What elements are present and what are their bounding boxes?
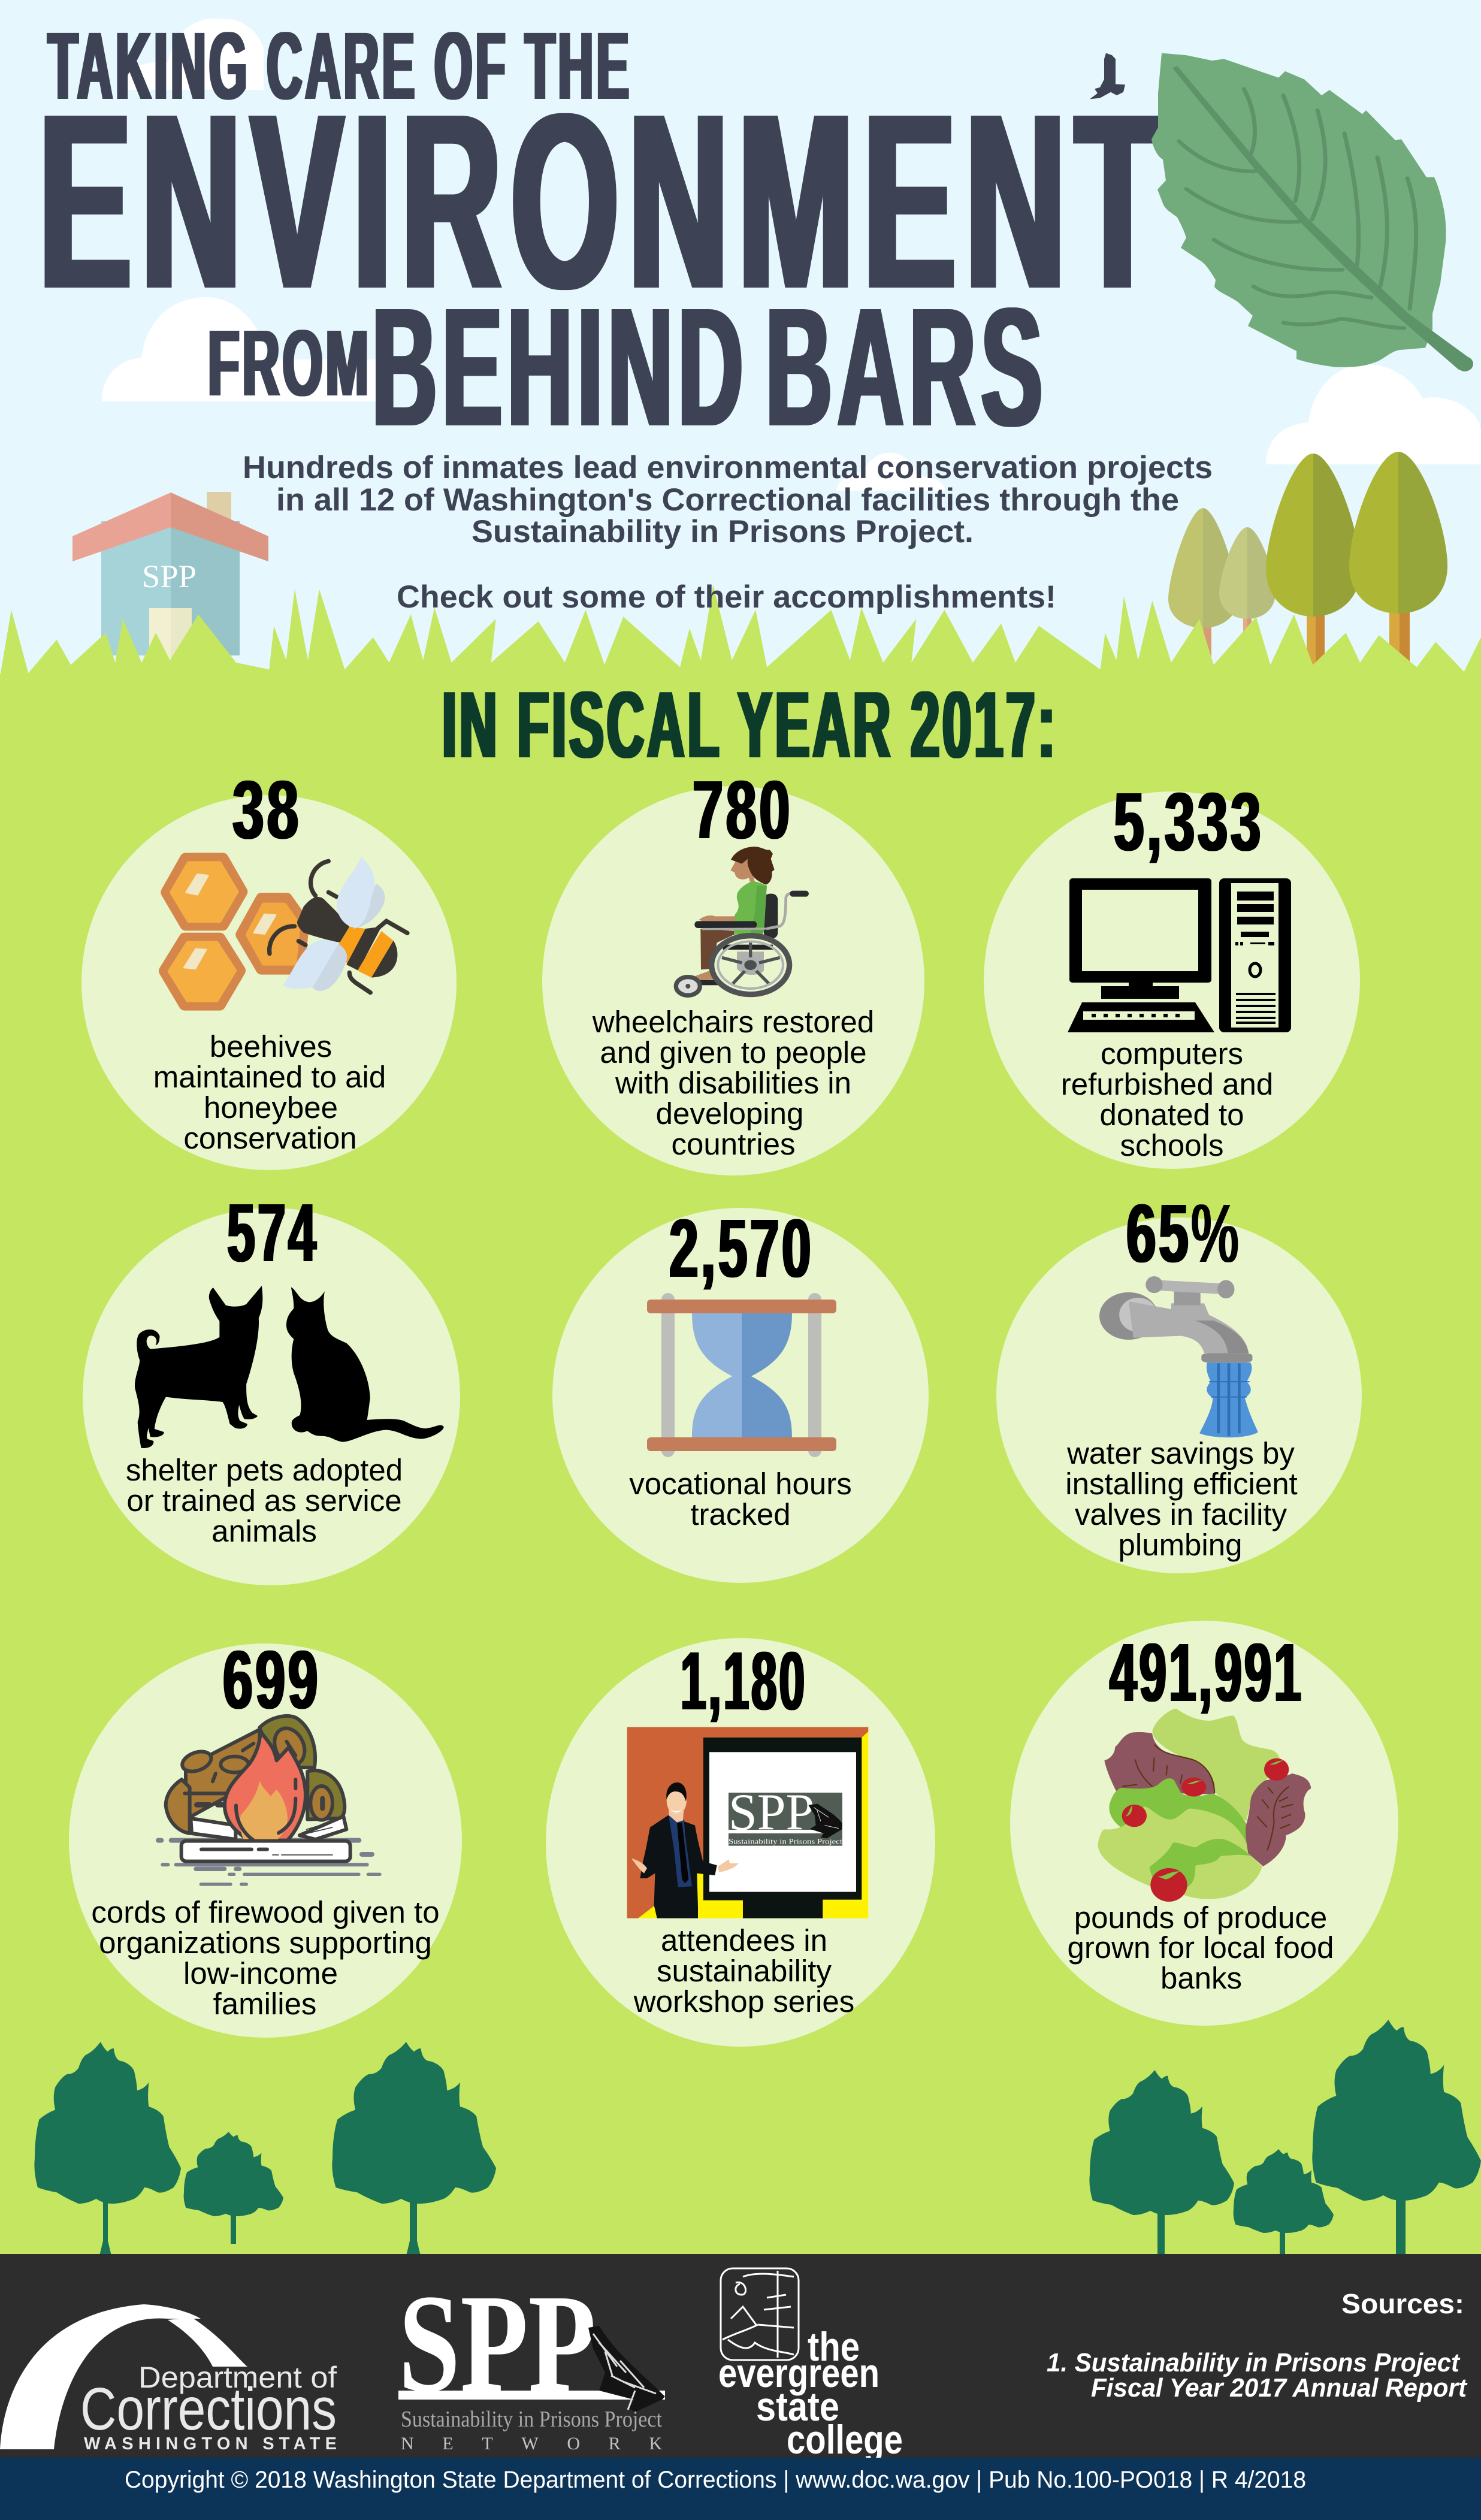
description: computers [1101,1037,1243,1071]
roof [72,492,268,561]
description: low-income [183,1956,338,1990]
college name: evergreen [718,2350,879,2396]
icon: dog and cat silhouettes [135,1286,444,1448]
circle [81,795,457,1170]
icon: desktop computer [1068,878,1291,1032]
description: grown for local food [1067,1930,1334,1965]
copyright text: Copyright © 2018 Washington State Department of Corrections | www.doc.wa.gov | Pub No.100-PO018 | R 4/2018 [125,2467,1306,2493]
description [592,1005,874,1161]
description: refurbished and [1061,1067,1273,1101]
panel: vocational hours [552,1202,929,1583]
description: conservation [183,1121,357,1155]
arch [0,2304,247,2449]
description: schools [1120,1128,1223,1162]
agency text: Corrections [80,2376,337,2443]
panel: workshops [546,1635,935,2047]
number: 65% [1126,1188,1241,1280]
SPP slide logo [729,1783,843,1846]
logo: the evergreen state college [718,2268,903,2462]
description [91,1895,440,2021]
clouds [102,19,1481,491]
icon: leaf [1151,53,1473,371]
description: sustainability [657,1954,832,1988]
sources heading: Sources: [1341,2288,1464,2319]
description: with disabilities in [615,1066,851,1100]
circle [542,786,924,1176]
circle [552,1208,929,1583]
description: shelter pets adopted [126,1453,403,1487]
sources [1047,2288,1468,2403]
description: developing [656,1096,803,1131]
description [629,1467,852,1531]
description [1061,1037,1273,1162]
number: 780 [693,764,793,856]
description: beehives [210,1029,332,1063]
green ground [0,674,1481,2256]
title line: behind: BEHIND [372,273,748,461]
description: workshop series [633,1984,854,2019]
SPP sign: SPP [142,558,197,594]
description: donated to [1099,1098,1244,1132]
intro line 3: Sustainability in Prisons Project. [471,514,974,549]
panel: beehives [81,764,457,1170]
description: or trained as service [126,1483,402,1518]
description [1065,1436,1298,1562]
panel: produce [1010,1621,1398,2026]
description: families [213,1987,316,2021]
intro text [243,450,1213,615]
description: installing efficient [1065,1467,1298,1501]
house walls [101,521,240,655]
panel: firewood [69,1634,462,2038]
agency text: Department of [138,2361,337,2394]
circle [83,1208,460,1585]
college name [718,2324,903,2462]
trees: right cluster [1168,452,1447,668]
description: honeybee [204,1090,338,1125]
SPP slide logo: SPP [729,1783,814,1841]
agency text [80,2361,337,2453]
icon: honeycomb and bee [165,857,407,1005]
number: 1,180 [681,1635,807,1727]
description: wheelchairs restored [592,1005,874,1039]
intro line 1: Hundreds of inmates lead environmental conservation projects [243,450,1213,485]
circle [984,791,1360,1169]
description [1067,1900,1334,1995]
title line: bars: BARS [766,273,1048,461]
icon: water tap [1099,1276,1258,1437]
panel: wheelchairs [542,764,924,1176]
description: cords of firewood given to [91,1895,440,1929]
description [126,1453,403,1548]
house: SPP [72,492,268,659]
college name: state [756,2384,839,2430]
sky background [0,0,1481,779]
description: plumbing [1119,1528,1242,1562]
description: tracked [690,1497,791,1531]
intro line 4: Check out some of their accomplishments! [397,579,1056,615]
description [153,1029,386,1155]
presenter [631,1782,739,1918]
description: banks [1160,1961,1242,1995]
chimney [207,492,231,528]
description: attendees in [661,1923,827,1957]
panel: water savings [996,1188,1362,1573]
SPP slide logo: Sustainability in Prisons Project [729,1837,843,1845]
frog [588,2326,665,2412]
source line 1: 1. Sustainability in Prisons Project [1047,2348,1461,2377]
number: 491,991 [1110,1627,1304,1719]
description: water savings by [1066,1436,1295,1470]
icon: person in wheelchair [676,847,809,995]
circle [1010,1621,1398,2026]
logo: SPP network: SPP [398,2265,596,2421]
description: animals [211,1514,317,1548]
description: and given to people [600,1035,867,1069]
description: countries [672,1127,795,1161]
logo: SPP network: Sustainability in Prisons Project [401,2407,662,2432]
title line: from: FROM [208,311,371,416]
number: 5,333 [1114,776,1264,868]
copyright band [0,2458,1481,2520]
intro line 2: in all 12 of Washington's Correctional facilities through the [276,482,1179,518]
title line: Taking care of the: TAKING CARE OF THE [48,12,632,119]
description: pounds of produce [1074,1900,1327,1935]
circle [69,1643,462,2038]
source line 2: Fiscal Year 2017 Annual Report [1091,2373,1468,2403]
icon: bird [1090,53,1125,99]
icon: presenter and screen [627,1727,868,1918]
description: vocational hours [629,1467,852,1501]
number: 699 [223,1634,321,1726]
icon: hourglass [647,1293,836,1457]
footer band [0,2254,1481,2458]
tree emblem [721,2268,799,2360]
college name: college [787,2417,903,2462]
panel: computers [984,776,1360,1169]
circle [546,1638,935,2047]
door [149,608,192,659]
logo: SPP network: NETWORK [401,2434,662,2453]
icon: campfire and logs [156,1716,382,1886]
title [39,12,1169,461]
logo: Department of Corrections [0,2304,337,2453]
description: organizations supporting [99,1926,432,1960]
description [633,1923,854,2019]
description: maintained to aid [153,1060,386,1094]
trees: bottom left and right [34,2020,1481,2256]
number: 574 [227,1187,319,1279]
circle [996,1217,1362,1573]
icon: salad and tomatoes [1098,1709,1311,1902]
panel: shelter pets [83,1187,460,1585]
number: 38 [232,764,301,856]
agency text: WASHINGTON STATE [84,2434,337,2453]
grass blades [0,585,1481,676]
college name: the [808,2324,860,2370]
description: valves in facility [1075,1497,1287,1531]
number: 2,570 [669,1202,814,1295]
